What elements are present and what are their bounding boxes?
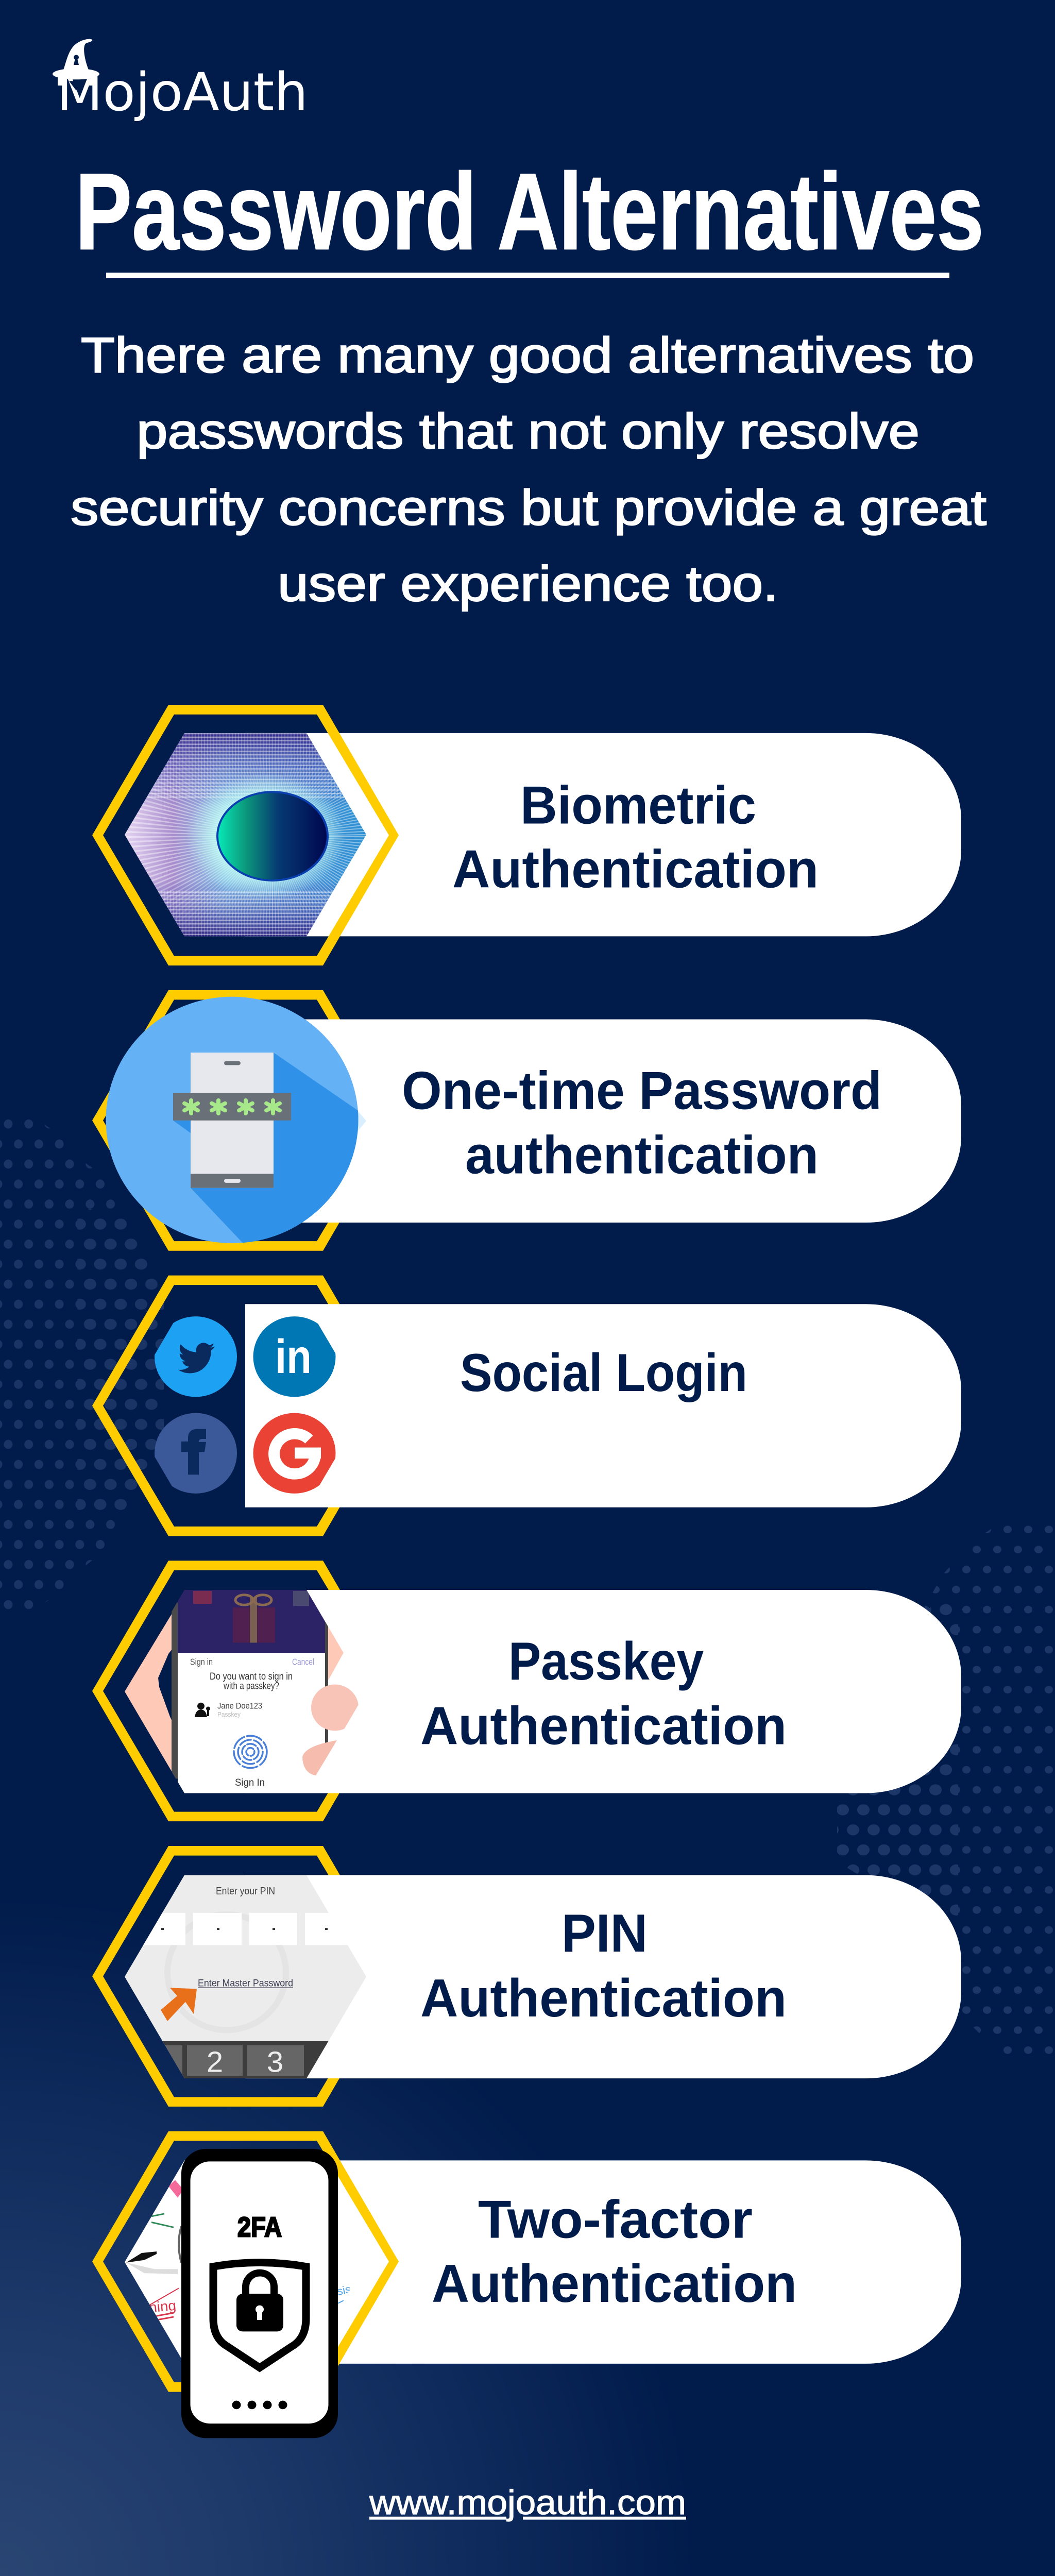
image: phone with passkey prompt: Do you want to sign in [210, 1671, 293, 1682]
label [432, 2190, 797, 2313]
image: phone with passkey prompt [125, 1590, 359, 1793]
image: PIN entry screen [125, 1875, 366, 2078]
image: whiteboard sketch [125, 2160, 366, 2364]
image: PIN entry screen: Enter Master Password [198, 1978, 293, 1989]
yellow hexagon frame [92, 1846, 399, 2107]
image: phone with passkey prompt: Sign in [190, 1657, 213, 1667]
panel: one-time password authentication [92, 990, 961, 1251]
image: whiteboard sketch: ning [148, 2297, 177, 2315]
panel: biometric authentication [92, 705, 961, 965]
icon: twitter [155, 1316, 237, 1397]
icon: fingerprint [234, 1736, 267, 1768]
image: PIN entry screen: Enter your PIN [216, 1885, 275, 1897]
icon: linkedin [253, 1316, 336, 1397]
panel: passkey authentication [92, 1561, 961, 1821]
image: PIN entry screen: 2 [207, 2046, 223, 2078]
faint image tip [350, 1102, 366, 1140]
footer website link: www.mojoauth.com [369, 2484, 686, 2522]
pill background [245, 1875, 961, 2078]
image: phone with passkey prompt: with a passkey? [223, 1681, 279, 1691]
image: phone with passkey prompt: Jane Doe123 [217, 1701, 262, 1710]
intro paragraph: security concerns but provide a great [71, 480, 986, 535]
intro paragraph: passwords that not only resolve [137, 403, 920, 459]
pill background [245, 2160, 961, 2364]
icon: google [253, 1413, 336, 1494]
title underline [106, 273, 949, 278]
label: Passkey [508, 1632, 704, 1691]
icon: linkedin: in [275, 1330, 312, 1383]
image: PIN entry screen: 3 [267, 2046, 283, 2078]
label: Biometric [520, 776, 756, 835]
icon: phone with masked password [106, 997, 371, 1248]
label [420, 1904, 787, 2028]
label: Social Login [460, 1343, 747, 1403]
yellow hexagon frame [92, 990, 399, 1251]
yellow hexagon frame [92, 1561, 399, 1821]
intro paragraph [71, 327, 986, 612]
label: Two-factor [478, 2190, 753, 2249]
label: authentication [465, 1125, 819, 1185]
image: phone with passkey prompt: Sign In [235, 1777, 265, 1788]
pill background [245, 733, 961, 936]
label: Authentication [420, 1697, 787, 1756]
pill background [245, 1304, 961, 1507]
label [402, 1061, 882, 1185]
image: phone with passkey prompt: Cancel [292, 1657, 314, 1667]
icon: phone with 2FA shield [181, 2149, 338, 2438]
icon: phone with 2FA shield: 2FA [237, 2211, 282, 2243]
icon: wizard hat with keyhole [53, 39, 99, 91]
label: Authentication [452, 840, 819, 899]
label: Authentication [420, 1969, 787, 2028]
image: phone with passkey prompt: Passkey [217, 1710, 241, 1718]
intro paragraph: user experience too. [278, 555, 778, 612]
social icons [155, 1316, 336, 1494]
label: Authentication [432, 2254, 797, 2313]
label [420, 1632, 787, 1756]
icon: facebook [155, 1413, 237, 1494]
panel: pin authentication [92, 1846, 961, 2107]
label: PIN [561, 1904, 648, 1963]
yellow hexagon frame [92, 1276, 399, 1536]
image: whiteboard sketch: sis [336, 2282, 352, 2298]
logo: MojoAuth: MojoAuth [57, 62, 308, 123]
label [452, 776, 819, 899]
intro paragraph: There are many good alternatives to [81, 327, 974, 383]
panel: social login [92, 1276, 961, 1536]
pill background [245, 1020, 961, 1223]
yellow hexagon frame [92, 2131, 399, 2392]
image: biometric eye [125, 733, 366, 937]
label: One-time Password [402, 1061, 882, 1121]
yellow hexagon frame [92, 705, 399, 965]
pill background [245, 1590, 961, 1793]
panel: two-factor authentication [92, 2131, 961, 2438]
